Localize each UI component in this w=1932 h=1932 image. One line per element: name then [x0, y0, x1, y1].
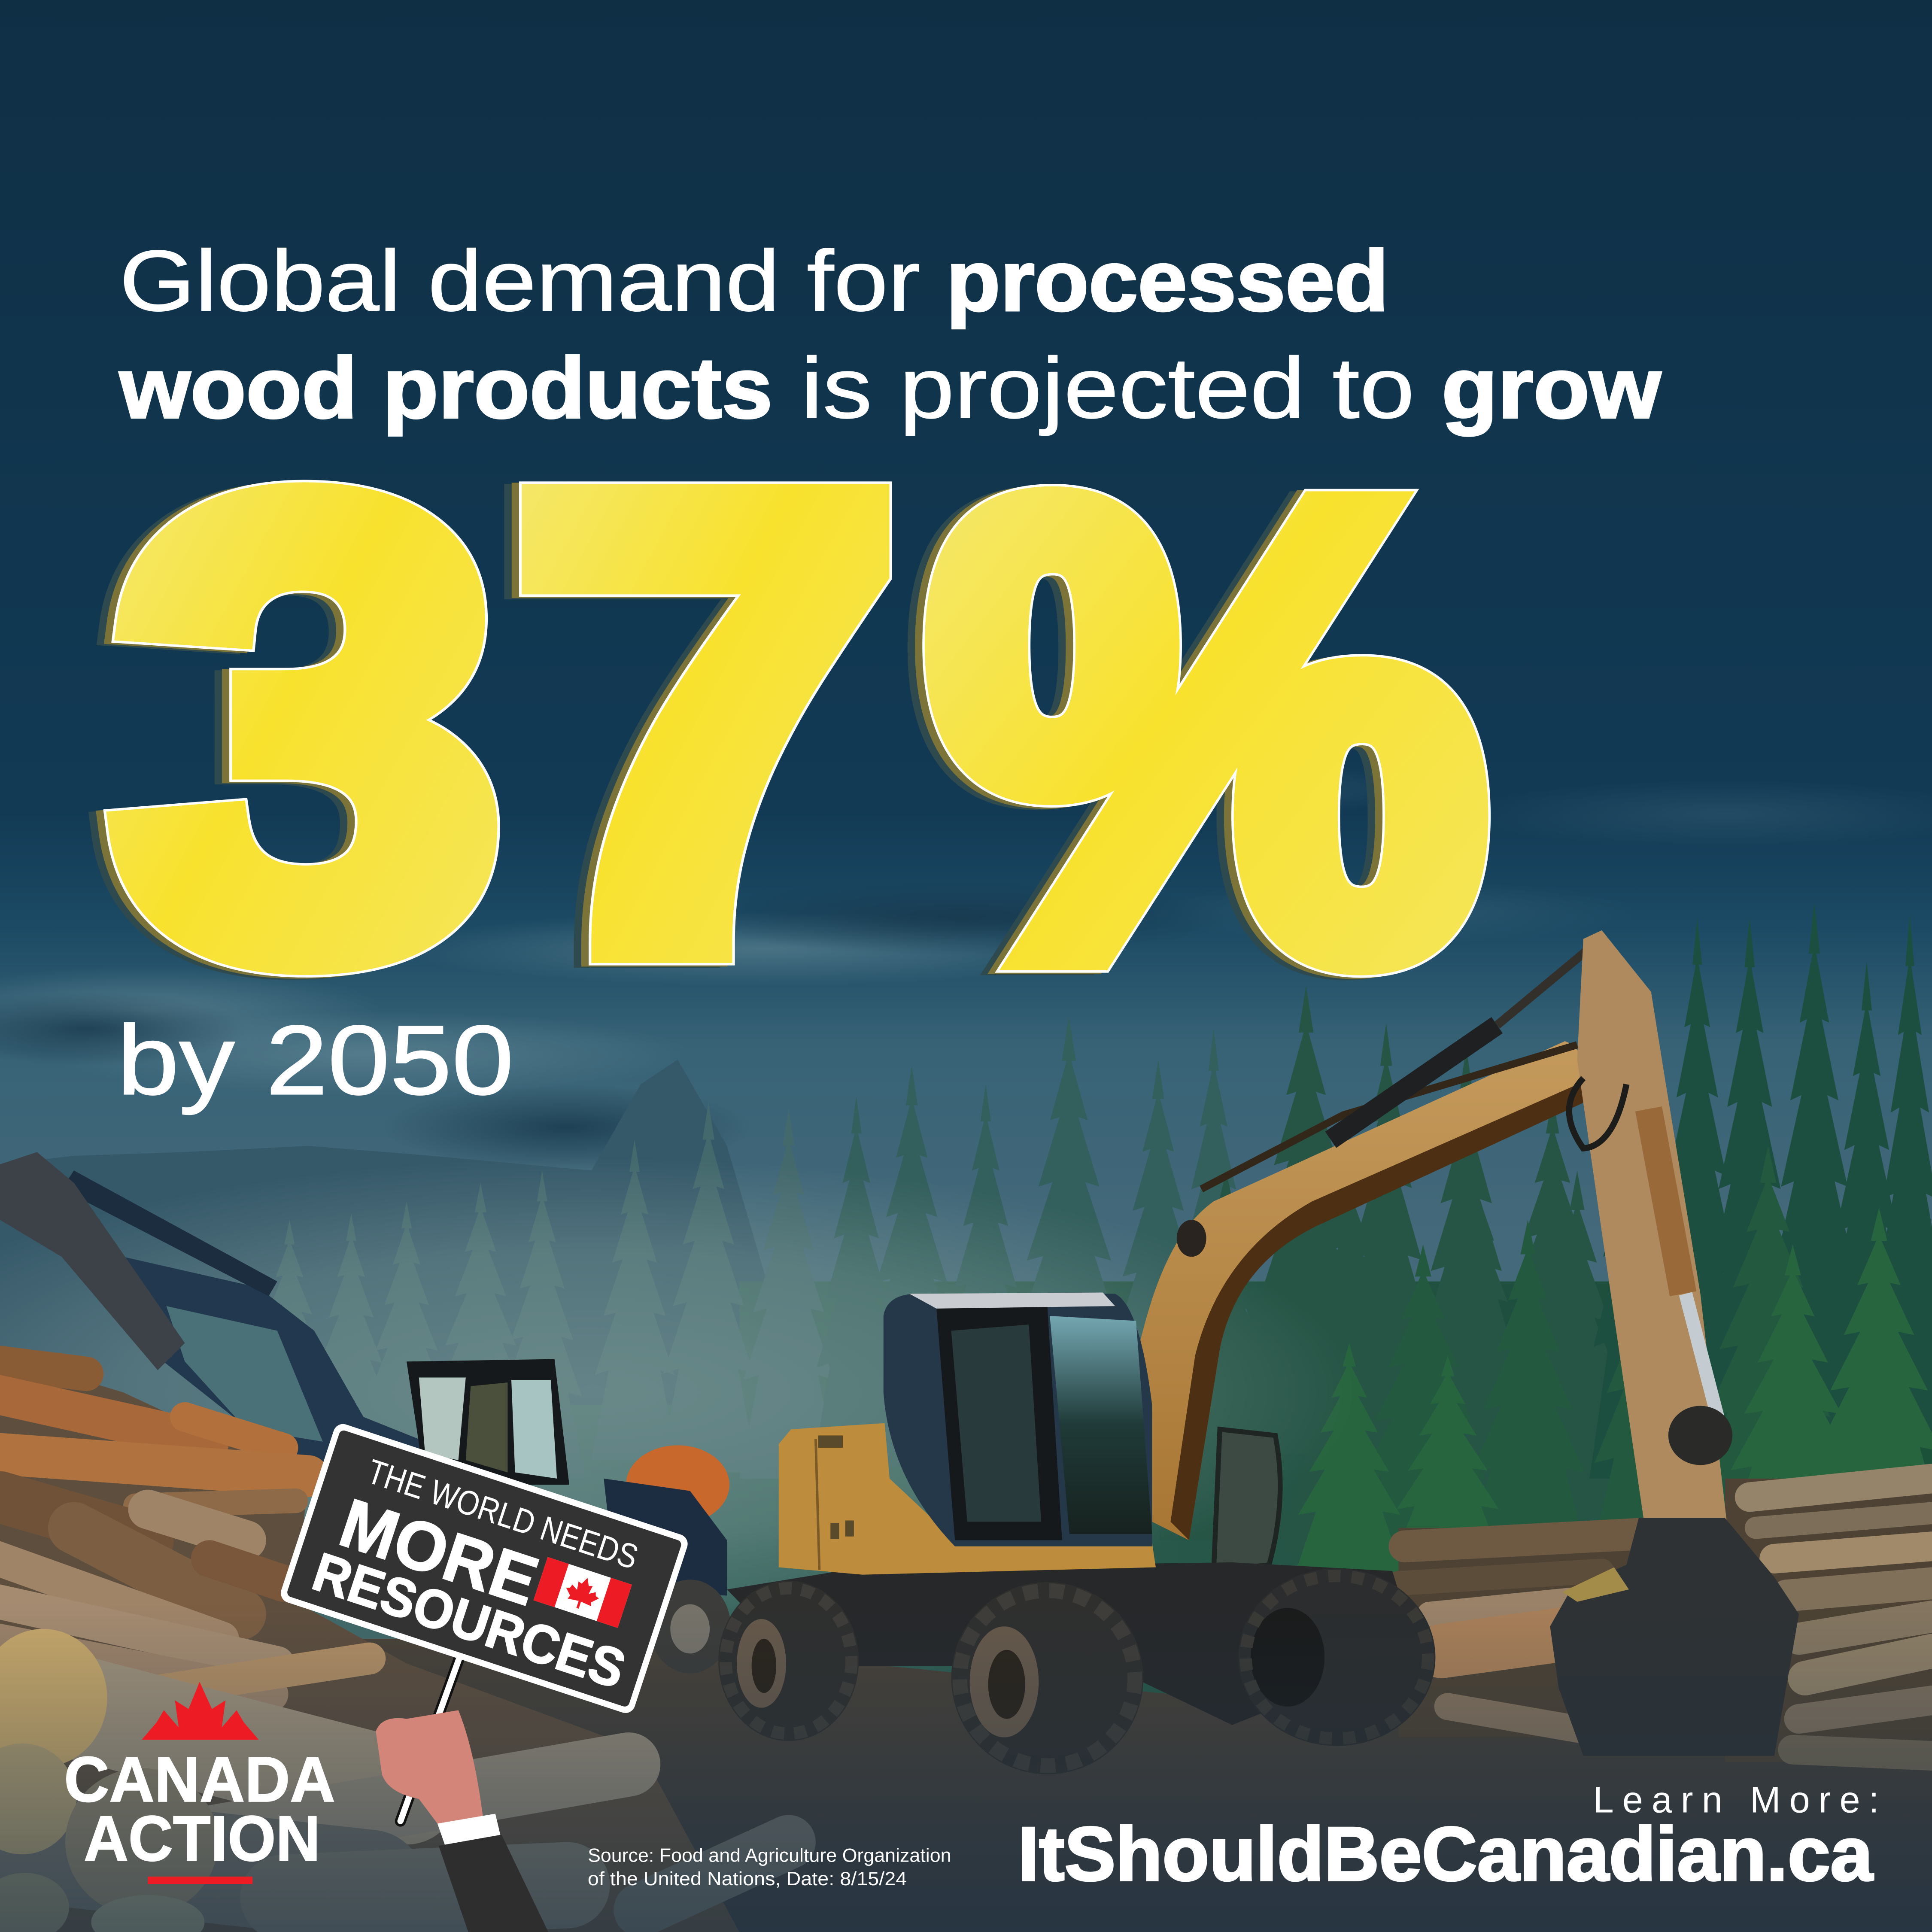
log pile: right [1398, 1479, 1932, 1762]
yellow face: 3 [113, 369, 502, 1084]
headline: is projected to: is projected to [801, 340, 1415, 436]
white outline [113, 364, 1486, 1088]
learn more: Learn More: [1593, 1780, 1879, 1821]
main excavator [718, 930, 1799, 1774]
source note [588, 1845, 951, 1889]
excavator: engine housing [779, 1423, 1156, 1575]
source note: of the United Nations, Date: 8/15/24 [588, 1868, 907, 1889]
headline: grow: grow [1442, 340, 1661, 436]
excavator: undercarriage [727, 1562, 1417, 1725]
excavator: cab [884, 1293, 1152, 1546]
background: conifer forest [246, 902, 1932, 1762]
extrusion: olive layer: % [920, 373, 1479, 1089]
bottom dark vignette [0, 1602, 1932, 1932]
white outline: 3 [113, 369, 502, 1084]
source note: Source: Food and Agriculture Organization [588, 1845, 951, 1866]
big number: 37% [99, 364, 1486, 1090]
extrusion: olive layer: 3 [106, 370, 494, 1086]
background: hazy far ridge [0, 1060, 789, 1602]
sign: canadian flag [534, 1557, 632, 1628]
yellow face [113, 364, 1486, 1088]
Canada Action logo [64, 1682, 335, 1884]
excavator: wheels [718, 1568, 1435, 1774]
logo: wordmark [64, 1744, 335, 1874]
headline: wood products: wood products [119, 340, 772, 436]
excavator: boom [1140, 946, 1592, 1540]
extrusion: dark layer: 7 [498, 366, 884, 1082]
logo: red underline [148, 1877, 252, 1884]
shirt cuff [437, 1814, 501, 1848]
website url: ItShouldBeCanadian.ca [1018, 1811, 1874, 1896]
excavator: rear guard rail [1214, 1429, 1280, 1571]
jacket sleeve [439, 1835, 548, 1932]
second machine cab [407, 1359, 569, 1485]
white outline: 7 [513, 364, 899, 1080]
white outline: % [928, 371, 1486, 1088]
yellow face: 7 [513, 364, 899, 1080]
excavator: arm and cylinder [1569, 930, 1732, 1528]
headline: processed: processed [946, 232, 1388, 329]
sign: more: MORE [331, 1484, 547, 1620]
sign: resources: RESOURCES [306, 1541, 632, 1700]
background: valley mist [0, 1158, 1355, 1626]
logo: wordmark: CANADA [64, 1744, 335, 1815]
hand holding sign [278, 1422, 690, 1932]
ground: muddy logging site [0, 1639, 1932, 1932]
extrusion: olive layer [106, 365, 1479, 1089]
yellow face: % [928, 371, 1486, 1088]
headline: line one regular: Global demand for [119, 232, 920, 329]
extrusion: dark layer: % [913, 374, 1471, 1090]
extrusion: dark layer: 3 [99, 371, 487, 1087]
left excavator [0, 1152, 425, 1491]
sign stick [401, 1657, 459, 1821]
hand [376, 1710, 483, 1823]
extrusion: dark layer [99, 366, 1471, 1090]
headline [119, 232, 1661, 436]
log pile: left [0, 1355, 789, 1932]
logo: wordmark: ACTION [84, 1803, 320, 1874]
sign board [278, 1422, 690, 1716]
excavator: bucket [1550, 1518, 1799, 1756]
extrusion: olive layer: 7 [505, 365, 892, 1081]
sign: the world needs: THE WORLD NEEDS [363, 1452, 643, 1577]
logo: maple leaf [142, 1682, 259, 1740]
by 2050: by 2050 [117, 1005, 514, 1115]
call to action [1018, 1780, 1879, 1896]
forwarder with orange logs [604, 1445, 731, 1673]
